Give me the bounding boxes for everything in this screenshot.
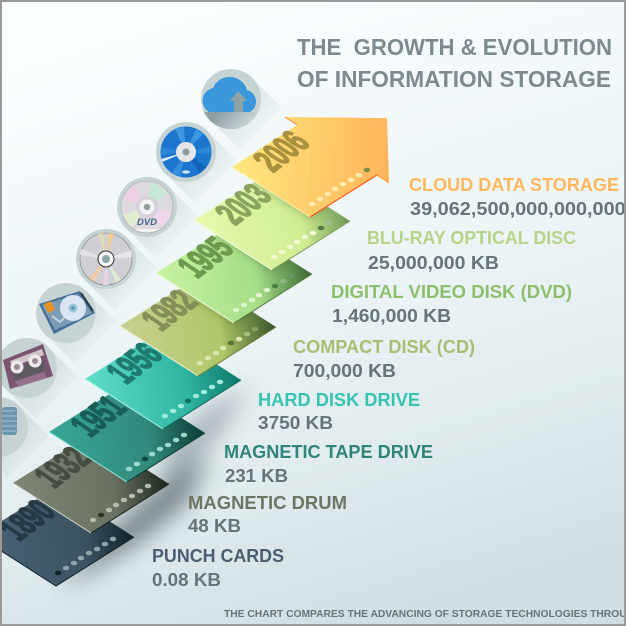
dots [162,380,223,418]
label: blu-ray optical disc: BLU-RAY OPTICAL DISC [367,228,576,248]
step: 1890 punch cards [0,487,134,586]
icon: compact disc [76,229,157,310]
dots [197,327,258,365]
year 1982: 1982 [132,284,206,337]
label: compact disk: 700,000 KB [293,361,396,381]
icon: cassette tape [0,338,78,419]
dots [233,274,294,312]
label: blu-ray optical disc [367,228,576,273]
step: 2006 cloud storage arrow [232,117,389,217]
icon: hard disk [36,283,117,364]
dots [309,168,370,206]
label: blu-ray optical disc: 25,000,000 KB [368,253,499,273]
title [297,34,612,92]
step: 2003 blu-ray [194,182,350,270]
icon: cloud upload [201,69,282,150]
step: 1932 magnetic drum [13,434,169,533]
icon: DVD [117,177,198,258]
label: magnetic drum: MAGNETIC DRUM [188,493,347,513]
label: magnetic drum [188,493,347,536]
label: hard disk drive [258,390,420,433]
title: OF INFORMATION STORAGE [297,66,611,92]
label: hard disk drive: 3750 KB [258,413,333,433]
dots [271,221,332,259]
year 2006: 2006 [244,125,318,178]
label: magnetic tape drive: MAGNETIC TAPE DRIVE [224,442,433,462]
label: digital video disk: 1,460,000 KB [332,306,451,326]
label: magnetic drum: 48 KB [188,516,241,536]
label: digital video disk: DIGITAL VIDEO DISK (DVD) [331,282,572,302]
icon: tape reels [0,397,49,478]
step: 1951 magnetic tape [49,383,205,482]
step: 1995 digital video disk [156,235,312,324]
title: THE GROWTH & EVOLUTION [297,34,612,60]
icon: blu-ray disc [156,122,237,203]
year 1995: 1995 [168,231,242,284]
label: compact disk [293,337,475,381]
year 1956: 1956 [97,337,171,390]
year 1932: 1932 [25,441,99,494]
dots [55,537,116,575]
label: hard disk drive: HARD DISK DRIVE [258,390,420,410]
footer note: THE CHART COMPARES THE ADVANCING OF STORAGE TECHNOLOGIES THROUGH [224,609,626,620]
label: punch cards: PUNCH CARDS [152,546,284,566]
label: magnetic tape drive: 231 KB [225,466,288,486]
label: cloud data storage: CLOUD DATA STORAGE [409,175,619,195]
dots [126,433,187,471]
dots [90,484,151,522]
year 1951: 1951 [61,390,135,443]
label: compact disk: COMPACT DISK (CD) [293,337,475,357]
step: 1982 compact disk [120,288,276,376]
year 2003: 2003 [206,178,280,231]
label: digital video disk [331,282,572,326]
step: 1956 hard disk [85,330,241,429]
label: magnetic tape drive [224,442,433,486]
soft shadow under steps [60,385,250,590]
label: punch cards: 0.08 KB [152,570,221,590]
dvd logo text: DVD [137,217,157,228]
label: punch cards [152,546,284,590]
label: cloud data storage [409,175,626,219]
